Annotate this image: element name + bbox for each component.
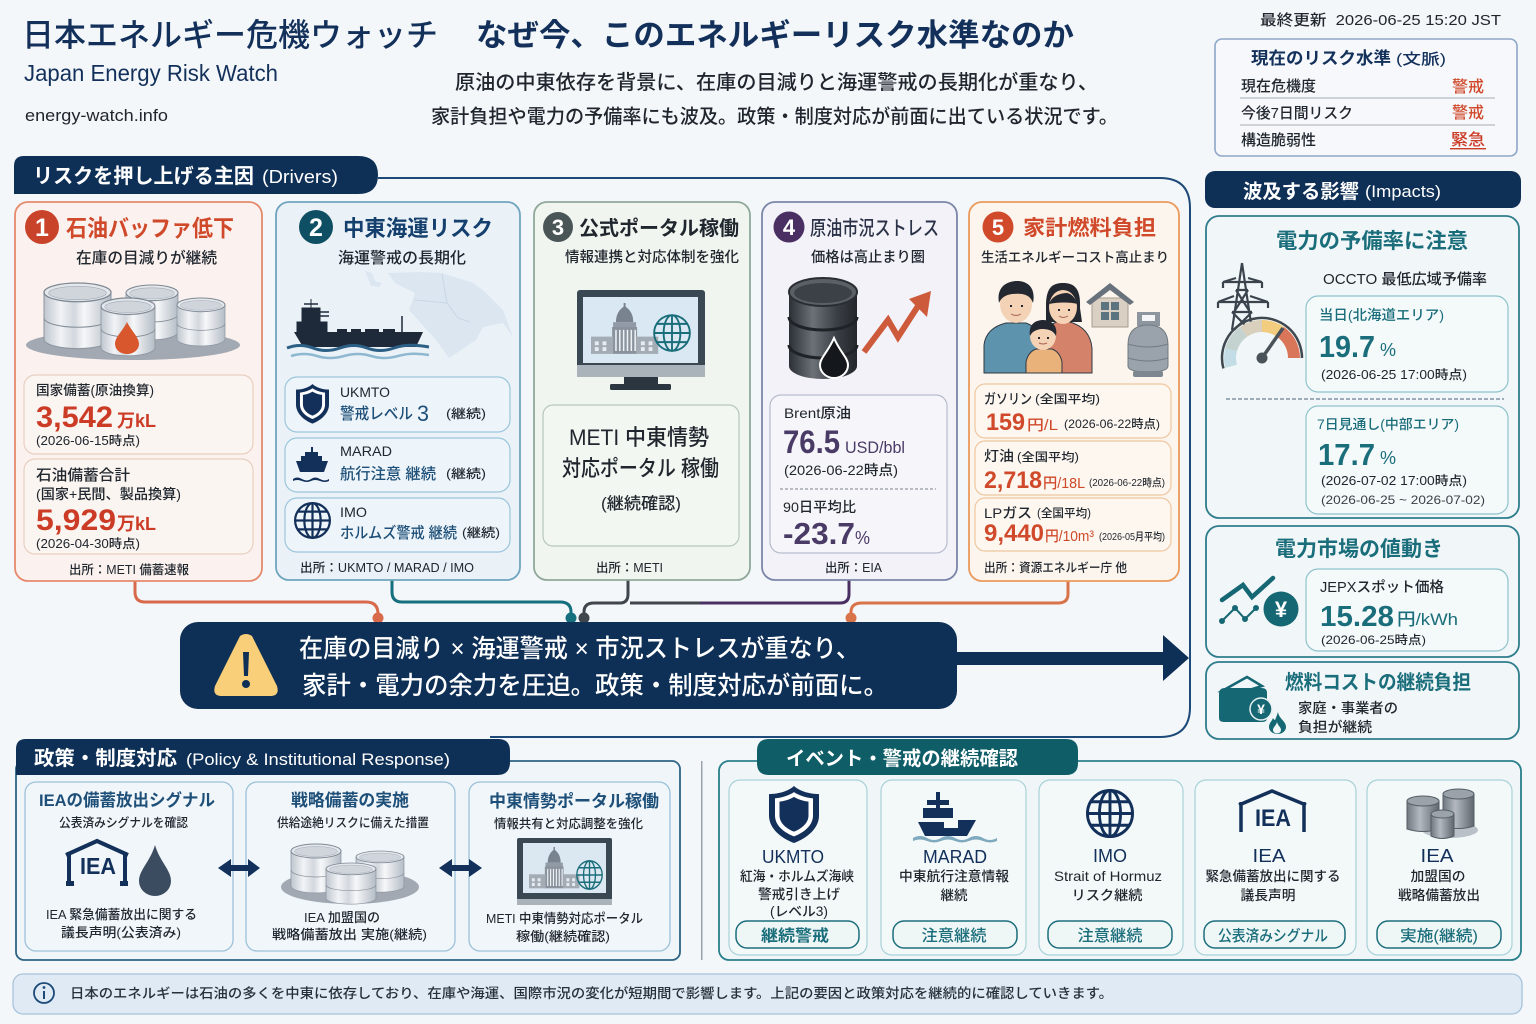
fuel: LP gas: 9,440 [984,520,1044,547]
policy card: strategic reserve: 供給途絶リスクに備えた措置 [277,815,429,830]
policy card: IEA signal: 議長声明(公表済み) [61,925,181,940]
event card: UKMTO [729,780,867,955]
event card: IEA statement [1195,780,1356,955]
panel: current risk level [1215,39,1517,156]
heading: policy [16,739,510,775]
impact text: 家庭・事業者の [1298,700,1398,716]
icon: IEA building [66,841,128,886]
summary banner: 家計・電力の余力を圧迫。政策・制度対応が前面に。 [302,672,888,700]
impact text: 負担が継続 [1298,719,1372,735]
icon: globe [1087,790,1133,837]
title block [22,17,438,125]
event card: MARAD: MARAD [923,847,987,867]
card heading: 家計燃料負担 [1023,217,1156,240]
icon: IEA building: IEA [80,853,116,879]
icon: pylon and gauge [1218,263,1302,368]
event card: UKMTO: 警戒引き上げ [758,887,841,902]
icon: drums [1407,789,1478,838]
status box: METI 中東情勢 [569,425,709,450]
source: 出所：UKMTO / MARAD / IMO [300,561,474,575]
panel: events [719,739,1521,960]
policy card: portal: METI 中東情勢対応ポータル [486,911,643,926]
stat: today [1306,296,1508,392]
source: 出所：METI 備蓄速報 [69,562,189,577]
stat: JEPX [1306,569,1508,651]
event card: IMO: IMO [1093,846,1127,866]
alert: UKMTO: (継続) [446,406,486,421]
status box: 対応ポータル 稼働 [562,456,719,481]
summary banner [180,622,957,709]
icon: IEA building [1239,791,1306,832]
lead text [431,71,1118,128]
alert: MARAD: 航行注意 継続 [340,465,436,483]
risk row: current: 現在危機度 [1241,78,1316,95]
card heading: 公式ポータル稼働 [579,217,739,240]
icon: price chart and yen [1219,578,1298,626]
alert: IMO: IMO [340,504,367,520]
stat: total reserve: (国家+民間、製品換算) [36,486,181,502]
badge 4 [774,212,804,242]
stat: today: (2026-06-25 17:00時点) [1321,367,1467,382]
stat: 7-day outlook: 17.7 [1318,437,1375,472]
stat: 7-day outlook: (2026-07-02 17:00時点) [1321,473,1467,488]
badge 3 [543,212,573,242]
panel: reserve margin [1206,216,1519,518]
heading: policy: (Policy & Institutional Response) [186,750,450,769]
fuel: gasoline: 円/L [1027,417,1058,434]
policy card: portal: 情報共有と対応調整を強化 [494,816,643,831]
panel: driver 4 market [762,202,957,580]
status pill: 公表済みシグナル [1218,927,1328,945]
policy card: strategic reserve: 戦略備蓄の実施 [291,790,409,810]
card heading: 中東海運リスク [343,216,493,241]
stat: Brent: 76.5 [783,424,840,460]
alert: IMO: ホルムズ警戒 継続 [340,523,457,542]
connectors from driver cards to summary banner [135,580,1068,624]
stat: 7-day outlook: 7日見通し(中部エリア) [1317,417,1459,432]
icon: monitor with capitol [577,290,705,390]
main heading: なぜ今、このエネルギーリスク水準なのか [476,18,1074,53]
stat: JEPX: 15.28 [1320,601,1394,633]
card subtitle: 生活エネルギーコスト高止まり [981,249,1169,265]
stat: Brent [783,405,905,478]
policy card: portal: 稼働(継続確認) [516,929,610,944]
icon: wallet [1219,677,1286,734]
event card: IEA release: 加盟国の [1410,869,1466,884]
risk row: current [1241,77,1484,96]
event card: IEA release: IEA [1420,846,1454,866]
banner text: 在庫の目減り × 海運警戒 × 市況ストレスが重なり、 [299,635,860,663]
event card: IMO: Strait of Hormuz [1054,868,1162,884]
fuel: LP gas: 円/10m³ [1045,528,1094,545]
heading: events: イベント・警戒の継続確認 [786,748,1018,770]
event card: MARAD [881,780,1026,955]
icon: oil barrel and rising arrow [789,278,931,379]
badge 2 [299,210,333,244]
card subtitle: 情報連携と対応体制を強化 [565,249,739,266]
fuel: gasoline: 159 [986,409,1025,436]
illustration: ship and map [287,271,513,358]
heading: impacts [1205,171,1521,208]
stat: vs 90 days: -23.7 [783,516,855,551]
alert: MARAD: (継続) [446,466,486,481]
policy card: IEA signal [25,782,233,951]
stat: total reserve [24,459,253,554]
stat: JEPX: 円/kWh [1397,610,1458,629]
alert: UKMTO: UKMTO [340,384,390,400]
icon: monitor [517,838,612,905]
event card: IEA statement: 緊急備蓄放出に関する [1206,868,1340,884]
fuel: kerosene: (2026-06-22時点) [1089,476,1165,489]
badge 1 [25,210,59,244]
source: 出所：EIA [825,561,883,575]
status pill: 注意継続 [922,927,986,945]
panel: driver 1 oil buffer [15,202,262,581]
stat: today: % [1380,340,1396,360]
status pill: 注意継続 [1078,927,1142,945]
fuel: LP gas: LPガス [984,505,1032,521]
risk row: structural: 緊急 [1451,131,1485,149]
icon: oil tanks [26,283,240,360]
lead text: 家計負担や電力の予備率にも波及。政策・制度対応が前面に出ている状況です。 [431,106,1118,128]
stat: vs 90 days: % [855,528,870,548]
icon: oil drop [139,845,171,896]
card subtitle: 在庫の目減りが継続 [76,248,217,267]
alert: UKMTO [285,377,510,432]
impact text [1298,700,1398,735]
fuel: kerosene: 灯油 [984,448,1014,464]
heading: impacts: (Impacts) [1365,182,1441,201]
fuel: kerosene: 円/18L [1043,475,1085,492]
icon: family, house and gas cylinder [984,281,1168,377]
risk row: 7 days [1241,103,1484,122]
stat: Brent: Brent原油 [784,405,851,421]
fuel: kerosene: (全国平均) [1017,450,1079,464]
stat: total reserve: (2026-04-30時点) [36,536,140,551]
icon: IEA building: IEA [1255,805,1291,832]
badge 1: 1 [35,214,49,242]
status pill [1204,921,1345,948]
badge 5: 5 [992,215,1004,240]
icon: globe [295,503,330,538]
fuel: LP gas: (2026-05月平均) [1099,530,1165,543]
alert: UKMTO: 警戒レベル [340,404,413,423]
fuel: gasoline [975,384,1171,438]
last updated: 最終更新 2026-06-25 15:20 JST [1260,12,1501,29]
fuel: kerosene: 2,718 [984,467,1042,494]
risk row: current: 警戒 [1452,77,1484,96]
risk row: 7 days: 警戒 [1452,103,1484,122]
stat: JEPX: (2026-06-25時点) [1321,632,1426,647]
impact heading: 電力市場の値動き [1275,538,1443,561]
status box [543,405,739,546]
event card: IEA statement: IEA [1252,846,1286,866]
badge 2: 2 [309,214,323,242]
icon: info [34,983,54,1003]
policy card: IEA signal: IEA 緊急備蓄放出に関する [46,907,197,922]
arrow: banner to impacts [950,635,1189,681]
badge 3: 3 [552,215,564,240]
event card: IMO: リスク継続 [1072,887,1143,903]
heading: drivers [14,156,378,194]
badge 4: 4 [783,215,796,240]
status pill [736,921,859,948]
stat: JEPX: JEPXスポット価格 [1320,579,1445,596]
alert: IMO [285,498,510,552]
fuel: gasoline: ガソリン [984,391,1032,407]
icon: price chart and yen: ¥ [1275,597,1288,622]
stat: total reserve: 石油備蓄合計 [36,467,130,484]
icon: tanks [281,844,419,904]
stat: national reserve: (2026-06-15時点) [36,433,140,448]
event card: MARAD: 継続 [940,887,968,903]
policy card: strategic reserve: 戦略備蓄放出 実施(継続) [272,927,427,942]
event card: UKMTO: UKMTO [762,847,824,867]
source: 出所：資源エネルギー庁 他 [984,561,1127,575]
stat: 7-day outlook: % [1380,448,1396,468]
stat: vs 90 days [783,499,870,551]
stat: national reserve: 国家備蓄(原油換算) [36,382,154,398]
icon: ship [293,447,329,482]
event card: IEA release [1367,780,1512,955]
alert: UKMTO: 3 [417,401,429,426]
status pill [1377,921,1501,948]
title: Japanese: 日本エネルギー危機ウォッチ [22,17,438,53]
status pill: 継続警戒 [761,926,829,945]
panel: driver 5 household [969,202,1179,581]
alert: IMO: (継続) [462,525,500,540]
footer note [13,974,1522,1014]
drivers frame outline [378,178,1190,737]
arrow: bidirectional 2 [439,859,482,877]
card subtitle: 価格は高止まり圏 [811,249,925,266]
policy card: strategic reserve: IEA 加盟国の [304,910,380,925]
stat: total reserve: 5,929 [36,504,116,537]
stat: national reserve [24,375,253,454]
fuel: LP gas: (全国平均) [1037,506,1091,520]
panel: policy response [16,739,680,960]
heading: events [757,739,1078,775]
stat: total reserve: 万kL [117,514,156,534]
event card: IMO [1039,780,1183,955]
status pill [893,921,1017,948]
stat: vs 90 days: 90日平均比 [783,499,856,515]
heading: impacts: 波及する影響 [1243,181,1359,203]
badge 5 [982,212,1014,242]
source: 出所：METI [596,561,663,575]
stat: 7-day outlook: (2026-06-25 ~ 2026-07-02) [1321,493,1485,507]
stat: national reserve: 3,542 [36,401,113,434]
event card: IEA release: 戦略備蓄放出 [1398,888,1480,903]
title: English: Japan Energy Risk Watch [24,60,278,86]
policy card: portal: 中東情勢ポータル稼働 [489,791,659,811]
event card: MARAD: 中東航行注意情報 [899,868,1010,884]
arrow: bidirectional 1 [218,859,260,877]
footer note: 日本のエネルギーは石油の多くを中東に依存しており、在庫や海運、国際市況の変化が短期間で影響します。上記の要因と政策対応を継続的に確認していきます。 [70,985,1113,1001]
impact heading: 電力の予備率に注意 [1276,230,1468,253]
risk row: structural [1241,131,1486,149]
stat: today: 19.7 [1319,329,1375,364]
risk row: 7 days: 今後7日間リスク [1241,105,1353,122]
card heading: 原油市況ストレス [810,217,939,240]
policy card: strategic reserve [246,782,455,951]
stat: today: 当日(北海道エリア) [1319,307,1444,323]
stat: Brent: USD/bbl [845,438,905,457]
site url: energy-watch.info [25,106,168,125]
policy card: portal [469,782,670,951]
stat: Brent: (2026-06-22時点) [784,462,898,478]
alert: MARAD [285,438,510,492]
heading: drivers: リスクを押し上げる主因 [33,165,254,188]
stat: 7-day outlook [1306,406,1508,514]
fuel: gasoline: (2026-06-22時点) [1064,416,1160,431]
stat: national reserve: 万kL [117,411,156,431]
status box: (継続確認) [601,494,681,513]
icon: shield [769,786,819,843]
heading: drivers: (Drivers) [262,167,338,187]
risk row: structural: 構造脆弱性 [1241,131,1316,149]
status pill: 実施(継続) [1400,927,1478,945]
panel: driver 3 portal [534,202,750,580]
event card: IEA statement: 議長声明 [1240,887,1296,903]
stats box [770,395,947,553]
panel: power market [1206,526,1519,657]
card heading: 石油バッファ低下 [66,215,234,241]
panel: fuel cost [1206,662,1519,739]
heading: policy: 政策・制度対応 [34,747,177,770]
divider [701,761,702,960]
icon: wallet: ¥ [1257,701,1265,717]
icon: shield [296,384,329,424]
panel: current risk level: (文脈) [1396,51,1446,68]
event card: UKMTO: (レベル3) [770,904,828,919]
impact heading: 燃料コストの継続負担 [1285,671,1471,694]
label OCCTO: OCCTO 最低広域予備率 [1323,271,1487,288]
lead text: 原油の中東依存を背景に、在庫の目減りと海運警戒の長期化が重なり、 [455,71,1098,94]
icon: ship [913,792,997,842]
panel: driver 2 shipping [276,202,520,580]
icon: warning triangle [214,634,278,696]
policy card: IEA signal: IEAの備蓄放出シグナル [39,790,215,810]
policy card: IEA signal: 公表済みシグナルを確認 [59,815,188,830]
fuel: LP gas [975,498,1171,551]
fuel: kerosene [975,441,1171,495]
status pill [1048,921,1172,948]
alert: MARAD: MARAD [340,443,392,459]
risk panel heading: 現在のリスク水準 [1251,48,1391,68]
card subtitle: 海運警戒の長期化 [338,248,467,267]
fuel: gasoline: (全国平均) [1035,392,1100,406]
event card: UKMTO: 紅海・ホルムズ海峡 [740,868,854,884]
